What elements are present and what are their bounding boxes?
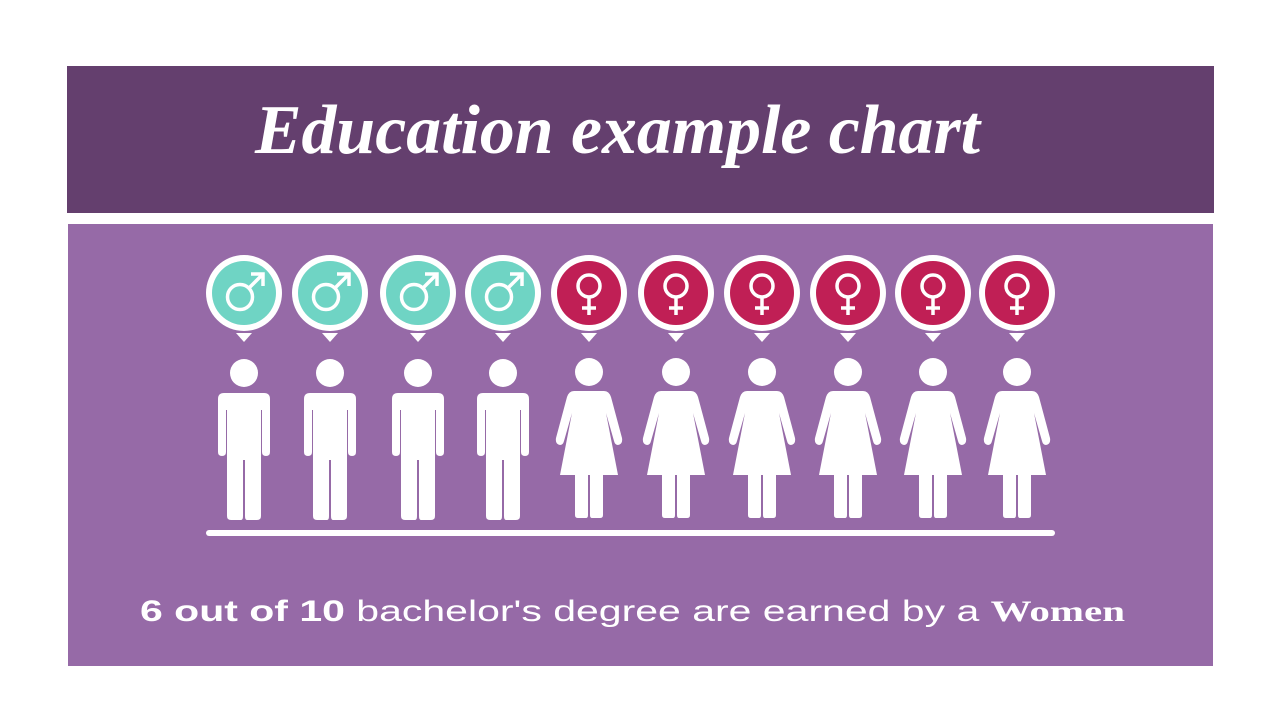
title: Education example chart <box>254 92 983 169</box>
badges: male <box>206 255 541 342</box>
panel: chart <box>68 224 1213 666</box>
baseline <box>206 530 1055 536</box>
header bar <box>67 66 1214 213</box>
figures: men <box>218 359 529 520</box>
badges: female <box>551 255 1055 342</box>
caption: 6 out of 10 bachelor's degree are earned by a Women <box>140 595 1125 628</box>
figures: women <box>556 358 1050 518</box>
